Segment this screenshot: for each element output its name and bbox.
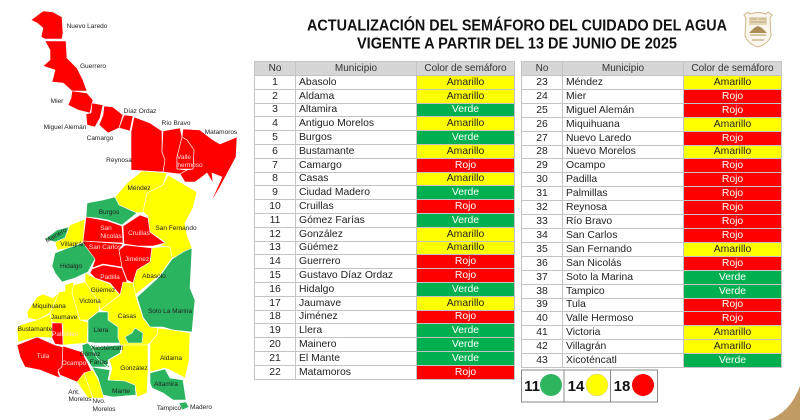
- map labels: González: [120, 365, 148, 372]
- rows 23 to 43: Rojo: [722, 174, 743, 185]
- rows 1 to 22: Casas: [299, 173, 328, 184]
- rows 23 to 43: 31: [536, 188, 548, 199]
- map labels: Casas: [118, 313, 137, 320]
- map labels: [18, 23, 238, 413]
- map labels: Altamira: [154, 381, 178, 388]
- map of Tamaulipas by semaphore colour: [17, 11, 238, 413]
- rows 1 to 22: Verde: [452, 187, 479, 198]
- rows 23 to 43: [536, 76, 781, 367]
- rows 23 to 43: 27: [536, 133, 548, 144]
- rows 23 to 43: Amarillo: [714, 244, 751, 255]
- rows 1 to 22: Rojo: [455, 256, 476, 267]
- rows 1 to 22: Verde: [452, 104, 479, 115]
- rows 1 to 22: 15: [269, 270, 281, 281]
- map labels: Farías: [90, 359, 109, 366]
- rows 1 to 22: 18: [269, 311, 281, 322]
- rows 23 to 43: Valle Hermoso: [566, 313, 633, 324]
- map labels: Burgos: [99, 209, 120, 216]
- rows 1 to 22: Cruillas: [299, 201, 334, 212]
- rows 1 to 22: 22: [269, 367, 281, 378]
- table header right: [522, 62, 781, 75]
- rows 1 to 22: Amarillo: [447, 118, 484, 129]
- rows 1 to 22: 13: [269, 242, 281, 253]
- rows 1 to 22: 7: [272, 160, 278, 171]
- rows 1 to 22: El Mante: [299, 353, 340, 364]
- rows 1 to 22: Jiménez: [299, 311, 338, 322]
- legend: yellow count: 14: [568, 378, 585, 395]
- map labels: Méndez: [127, 185, 151, 192]
- rows 23 to 43: Villagrán: [566, 341, 606, 352]
- rows 1 to 22: Amarillo: [447, 173, 484, 184]
- map labels: Díaz Ordaz: [124, 108, 156, 115]
- rows 23 to 43: 41: [536, 327, 548, 338]
- rows 1 to 22: Verde: [452, 353, 479, 364]
- rows 23 to 43: Rojo: [722, 160, 743, 171]
- map labels: Río Bravo: [162, 120, 191, 127]
- rows 1 to 22: 21: [269, 353, 281, 364]
- map labels: Padilla: [100, 274, 120, 281]
- title: [307, 16, 727, 53]
- rows 23 to 43: Nuevo Morelos: [566, 146, 636, 157]
- rows 23 to 43: 26: [536, 119, 548, 130]
- rows 23 to 43: Méndez: [566, 77, 603, 88]
- table header left: No: [269, 63, 281, 74]
- rows 1 to 22: Ciudad Madero: [299, 187, 370, 198]
- rows 23 to 43: Rojo: [722, 91, 743, 102]
- rows 23 to 43: 40: [536, 313, 548, 324]
- rows 1 to 22: Verde: [452, 284, 479, 295]
- rows 1 to 22: Rojo: [455, 367, 476, 378]
- rows 1 to 22: Rojo: [455, 270, 476, 281]
- map labels: Matamoros: [205, 129, 238, 136]
- map labels: Abasolo: [142, 273, 166, 280]
- rows 1 to 22: 5: [272, 132, 278, 143]
- map labels: Jaumave: [51, 314, 78, 321]
- rows 1 to 22: Burgos: [299, 132, 332, 143]
- rows 23 to 43: 28: [536, 146, 548, 157]
- map labels: San Carlos: [89, 244, 122, 251]
- rows 23 to 43: Soto la Marina: [566, 272, 633, 283]
- rows 1 to 22: Verde: [452, 215, 479, 226]
- rows 23 to 43: Amarillo: [714, 146, 751, 157]
- map labels: Tula: [37, 353, 50, 360]
- map labels: San: [100, 225, 112, 232]
- rows 23 to 43: Xicoténcatl: [566, 355, 617, 366]
- rows 23 to 43: Ocampo: [566, 160, 605, 171]
- map labels: hermoso: [177, 162, 203, 169]
- map regions: [17, 11, 237, 410]
- map labels: Gómez: [80, 351, 100, 358]
- rows 1 to 22: Rojo: [455, 311, 476, 322]
- rows 1 to 22: Matamoros: [299, 367, 351, 378]
- rows 23 to 43: Padilla: [566, 174, 597, 185]
- rows 23 to 43: 42: [536, 341, 548, 352]
- map labels: Cruillas: [128, 230, 151, 237]
- rows 1 to 22: Aldama: [299, 91, 334, 102]
- map labels: Nuevo Laredo: [67, 23, 108, 30]
- rows 1 to 22: Hidalgo: [299, 284, 334, 295]
- map labels: Nvo.: [92, 398, 106, 405]
- map labels: Tampico: [157, 405, 181, 412]
- rows 23 to 43: 30: [536, 174, 548, 185]
- rows 23 to 43: Amarillo: [714, 77, 751, 88]
- map labels: Aldama: [160, 355, 182, 362]
- rows 23 to 43: 43: [536, 355, 548, 366]
- map labels: Villagrán: [60, 241, 86, 248]
- map labels: Jiménez: [125, 256, 149, 263]
- map labels: Mainero: [44, 227, 69, 245]
- rows 1 to 22: 16: [269, 284, 281, 295]
- rows 23 to 43: Río Bravo: [566, 216, 612, 227]
- rows 23 to 43: 36: [536, 258, 548, 269]
- rows 1 to 22: Güémez: [299, 242, 338, 253]
- rows 1 to 22: Abasolo: [299, 77, 337, 88]
- map labels: Xicoténcatl: [91, 345, 123, 352]
- map labels: Miguel Alemán: [44, 124, 87, 131]
- rows 1 to 22: 14: [269, 256, 281, 267]
- rows 23 to 43: 37: [536, 272, 548, 283]
- corner decoration: brown curve: [768, 386, 800, 420]
- rows 1 to 22: Camargo: [299, 160, 342, 171]
- legend: green count: 11: [524, 378, 540, 395]
- title: VIGENTE A PARTIR DEL 13 DE JUNIO DE 2025: [357, 36, 677, 53]
- table header right: No: [536, 63, 548, 74]
- rows 1 to 22: Amarillo: [447, 229, 484, 240]
- rows 1 to 22: Mainero: [299, 339, 337, 350]
- rows 23 to 43: Reynosa: [566, 202, 607, 213]
- rows 1 to 22: 6: [272, 146, 278, 157]
- rows 1 to 22: Gómez Farías: [299, 215, 365, 226]
- rows 1 to 22: 20: [269, 339, 281, 350]
- rows 1 to 22: 8: [272, 173, 278, 184]
- rows 23 to 43: 35: [536, 244, 548, 255]
- rows 23 to 43: 25: [536, 105, 548, 116]
- icon: coat of arms crest: [743, 12, 773, 48]
- rows 23 to 43: 24: [536, 91, 548, 102]
- rows 1 to 22: Gustavo Díaz Ordaz: [299, 270, 393, 281]
- rows 23 to 43: Rojo: [722, 202, 743, 213]
- rows 23 to 43: 38: [536, 286, 548, 297]
- rows 1 to 22: Llera: [299, 325, 322, 336]
- rows 1 to 22: Guerrero: [299, 256, 341, 267]
- rows 23 to 43: San Fernando: [566, 244, 632, 255]
- rows 23 to 43: San Carlos: [566, 230, 617, 241]
- rows 1 to 22: [269, 76, 514, 379]
- rows 1 to 22: Jaumave: [299, 298, 341, 309]
- rows 23 to 43: 23: [536, 77, 548, 88]
- map labels: Morelos: [92, 406, 116, 413]
- table: municipalities 23 to 43: [521, 61, 782, 368]
- map labels: Reynosa: [106, 157, 132, 164]
- map labels: Güémez: [91, 287, 115, 294]
- map labels: Miquihuana: [32, 303, 66, 310]
- rows 23 to 43: Verde: [719, 355, 746, 366]
- map labels: Palmillas: [52, 331, 79, 338]
- rows 1 to 22: Amarillo: [447, 77, 484, 88]
- rows 1 to 22: 4: [272, 118, 278, 129]
- rows 1 to 22: 1: [272, 77, 278, 88]
- rows 23 to 43: Amarillo: [714, 341, 751, 352]
- rows 23 to 43: Rojo: [722, 230, 743, 241]
- rows 23 to 43: Victoria: [566, 327, 600, 338]
- rows 1 to 22: Amarillo: [447, 91, 484, 102]
- rows 1 to 22: Verde: [452, 132, 479, 143]
- rows 1 to 22: 19: [269, 325, 281, 336]
- rows 1 to 22: 10: [269, 201, 281, 212]
- rows 23 to 43: Tampico: [566, 286, 605, 297]
- map labels: Soto La Marina: [148, 308, 192, 315]
- rows 23 to 43: 33: [536, 216, 548, 227]
- map labels: Madero: [190, 404, 212, 411]
- rows 23 to 43: Rojo: [722, 105, 743, 116]
- map labels: Nicolás: [100, 233, 122, 240]
- rows 23 to 43: Tula: [566, 299, 586, 310]
- rows 1 to 22: Verde: [452, 325, 479, 336]
- rows 1 to 22: 2: [272, 91, 278, 102]
- table: municipalities 1 to 22: [254, 61, 515, 380]
- rows 23 to 43: Rojo: [722, 216, 743, 227]
- rows 23 to 43: Nuevo Laredo: [566, 133, 631, 144]
- map labels: Victoria: [79, 298, 101, 305]
- map labels: Valle: [177, 154, 191, 161]
- rows 1 to 22: 3: [272, 104, 278, 115]
- table header left: Municipio: [335, 63, 377, 74]
- rows 1 to 22: Altamira: [299, 104, 337, 115]
- rows 23 to 43: Verde: [719, 272, 746, 283]
- map labels: Morelos: [68, 396, 92, 403]
- map labels: San Fernando: [155, 225, 197, 232]
- map labels: Bustamante: [18, 326, 53, 333]
- rows 23 to 43: Rojo: [722, 299, 743, 310]
- map labels: Mante: [112, 388, 130, 395]
- map labels: Mier: [51, 98, 64, 105]
- map labels: Camargo: [87, 135, 114, 142]
- rows 23 to 43: San Nicolás: [566, 258, 621, 269]
- rows 1 to 22: 12: [269, 229, 281, 240]
- rows 1 to 22: González: [299, 229, 343, 240]
- rows 23 to 43: 39: [536, 299, 548, 310]
- legend: colour totals: [521, 370, 658, 402]
- rows 1 to 22: Verde: [452, 339, 479, 350]
- rows 23 to 43: 34: [536, 230, 548, 241]
- rows 23 to 43: Rojo: [722, 133, 743, 144]
- map labels: Llera: [94, 327, 109, 334]
- rows 1 to 22: 9: [272, 187, 278, 198]
- rows 1 to 22: Amarillo: [447, 298, 484, 309]
- rows 23 to 43: Mier: [566, 91, 586, 102]
- rows 1 to 22: Amarillo: [447, 146, 484, 157]
- rows 23 to 43: Verde: [719, 286, 746, 297]
- rows 1 to 22: 17: [269, 298, 281, 309]
- rows 1 to 22: Rojo: [455, 160, 476, 171]
- map labels: Ocampo: [62, 360, 87, 367]
- table header right: Municipio: [602, 63, 644, 74]
- table header left: Color de semáforo: [424, 63, 507, 74]
- rows 1 to 22: 11: [270, 215, 280, 226]
- rows 23 to 43: Rojo: [722, 188, 743, 199]
- table header right: Color de semáforo: [691, 63, 774, 74]
- rows 23 to 43: Amarillo: [714, 327, 751, 338]
- rows 23 to 43: Miguel Alemán: [566, 105, 634, 116]
- rows 23 to 43: 32: [536, 202, 548, 213]
- rows 1 to 22: Antiguo Morelos: [299, 118, 374, 129]
- rows 23 to 43: Rojo: [722, 313, 743, 324]
- legend: red count: 18: [614, 378, 630, 395]
- rows 23 to 43: 29: [536, 160, 548, 171]
- map labels: Hidalgo: [60, 263, 82, 270]
- rows 1 to 22: Bustamante: [299, 146, 354, 157]
- map labels: Ant.: [68, 389, 80, 396]
- rows 23 to 43: Palmillas: [566, 188, 608, 199]
- rows 23 to 43: Amarillo: [714, 119, 751, 130]
- rows 23 to 43: Miquihuana: [566, 119, 620, 130]
- table header left: [255, 62, 514, 75]
- rows 1 to 22: Amarillo: [447, 242, 484, 253]
- rows 1 to 22: Rojo: [455, 201, 476, 212]
- map labels: Guerrero: [80, 63, 106, 70]
- rows 23 to 43: Rojo: [722, 258, 743, 269]
